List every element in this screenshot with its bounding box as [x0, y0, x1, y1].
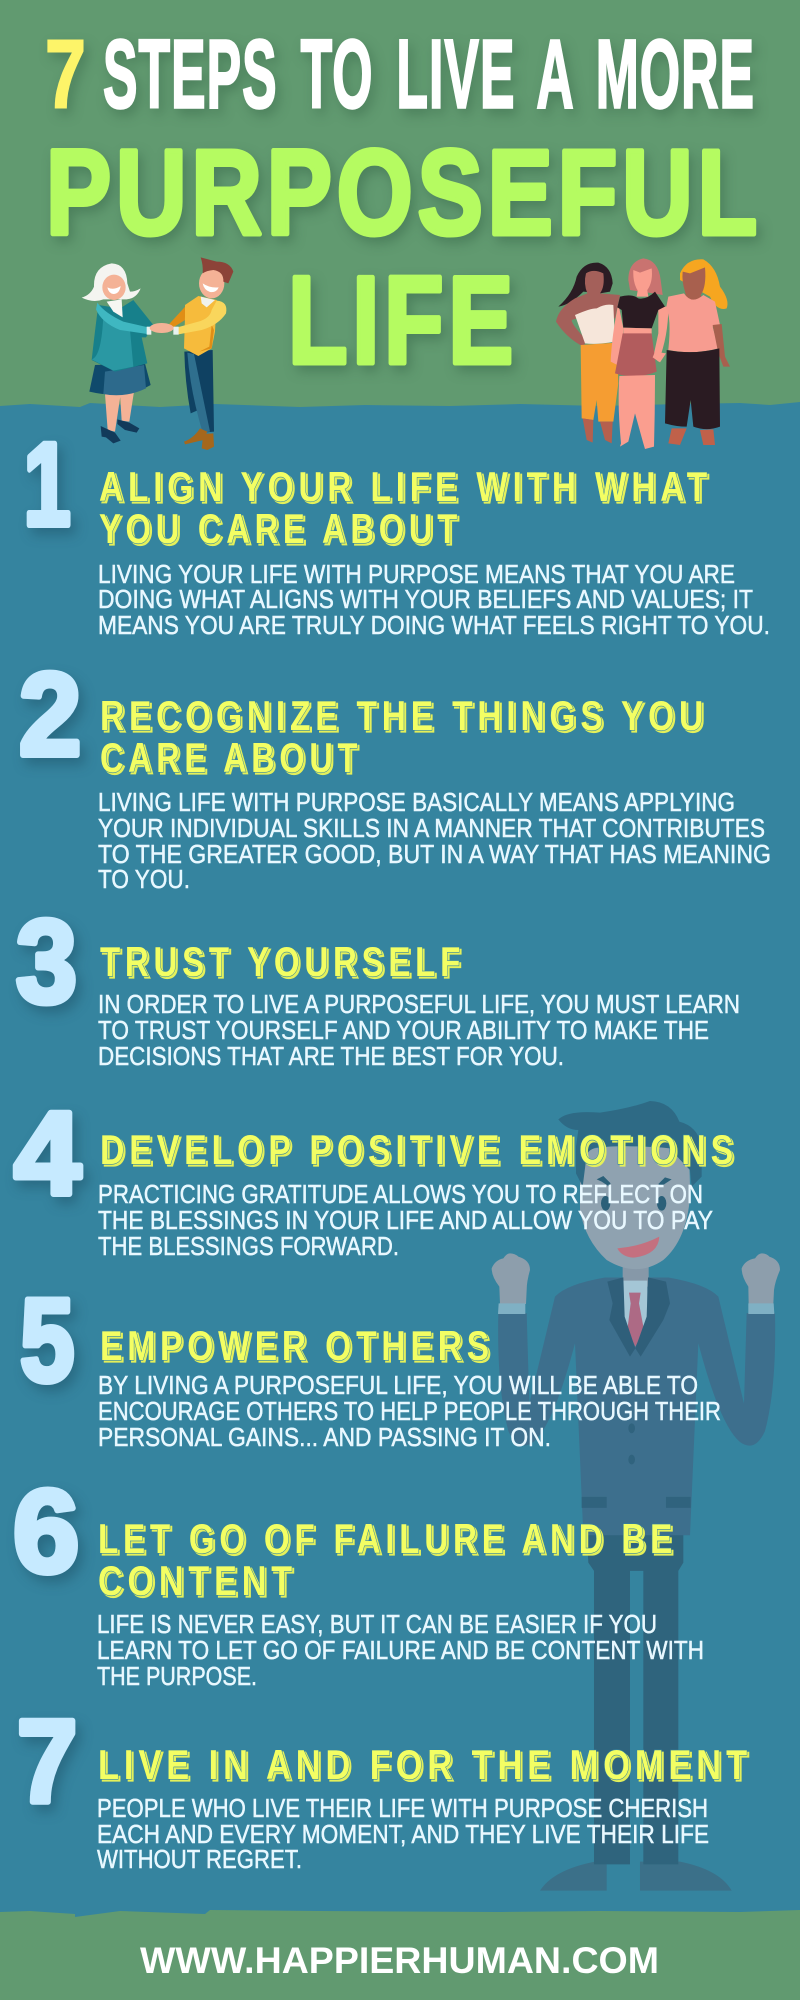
- man: sweater shadow arm: [168, 305, 187, 327]
- man: buttons and pocket flaps: [582, 1423, 691, 1508]
- man: head, collar and fists: [492, 1101, 780, 1357]
- woman 1: top: [575, 305, 615, 344]
- woman: smile: [107, 286, 121, 294]
- step 2: [19, 649, 771, 894]
- woman 3: hand: [653, 352, 666, 362]
- body 7: [97, 1793, 709, 1874]
- man: jacket and sleeves: [498, 1277, 775, 1535]
- body 2: [98, 787, 771, 894]
- footer url: WWW.HAPPIERHUMAN.COM: [140, 1940, 659, 1981]
- man: shirt: [623, 1281, 647, 1347]
- woman 2: legs: [619, 375, 655, 449]
- woman 2: arms and neck: [611, 287, 668, 365]
- body 4: PRACTICING GRATITUDE ALLOWS YOU TO REFLECT ON: [98, 1179, 703, 1209]
- man: hair: [558, 1101, 702, 1187]
- body 5: BY LIVING A PURPOSEFUL LIFE, YOU WILL BE ABLE TO: [98, 1370, 698, 1400]
- woman 2: crop top: [617, 292, 665, 328]
- step 1: [24, 418, 770, 640]
- heading 5: EMPOWER OTHERS: [100, 1322, 494, 1369]
- illustration: older woman and young man shaking hands: [82, 257, 233, 450]
- man: face: [199, 268, 224, 298]
- body 6: [97, 1609, 704, 1691]
- man: necktie: [627, 1293, 644, 1347]
- woman 2: face: [633, 268, 652, 292]
- heading 1: YOU CARE ABOUT: [99, 505, 462, 552]
- body 7: EACH AND EVERY MOMENT, AND THEY LIVE THEIR LIFE: [97, 1819, 709, 1849]
- heading 2: CARE ABOUT: [100, 734, 362, 781]
- man: neck: [623, 1263, 649, 1287]
- illustration: three women: [556, 258, 730, 449]
- title line 1: 7: 7: [45, 20, 86, 128]
- number 7: 7: [17, 1696, 77, 1828]
- number 1: 1: [24, 418, 71, 550]
- illustration: man in suit (faded): [492, 1101, 780, 1891]
- heading 1: [99, 463, 712, 552]
- background: blue panel with torn edges: [0, 402, 800, 1917]
- man: eyebrows and eyes: [597, 1176, 672, 1211]
- heading 2: [100, 692, 708, 781]
- title: [45, 20, 762, 390]
- woman 3: feet: [668, 428, 715, 445]
- woman: arm: [96, 303, 148, 334]
- body 4: THE BLESSINGS FORWARD.: [98, 1231, 399, 1261]
- body 4: [98, 1179, 713, 1261]
- body 7: WITHOUT REGRET.: [97, 1844, 302, 1874]
- woman: jacket front: [92, 315, 133, 371]
- heading 3: TRUST YOURSELF: [100, 938, 465, 985]
- title line 3: life: LIFE: [288, 252, 518, 390]
- body 4: THE BLESSINGS IN YOUR LIFE AND ALLOW YOU TO PAY: [98, 1205, 713, 1235]
- body 6: LEARN TO LET GO OF FAILURE AND BE CONTENT WITH: [97, 1635, 704, 1665]
- man: lapels: [607, 1277, 670, 1357]
- body 7: PEOPLE WHO LIVE THEIR LIFE WITH PURPOSE CHERISH: [97, 1793, 708, 1823]
- woman 1: feet: [583, 418, 613, 443]
- woman 3: face: [682, 267, 705, 300]
- body 5: [98, 1370, 721, 1452]
- woman 1: trousers: [581, 343, 618, 422]
- woman: shoes: [101, 419, 139, 443]
- number 3: 3: [16, 896, 77, 1028]
- number 5: 5: [20, 1274, 74, 1406]
- step 3: [16, 896, 740, 1071]
- man: raised fists: [492, 1253, 780, 1304]
- woman: face: [102, 275, 126, 300]
- step 6: [13, 1467, 704, 1691]
- body 2: TO YOU.: [98, 864, 190, 894]
- woman: blouse: [107, 299, 123, 317]
- man: face: [580, 1146, 690, 1269]
- man: shirt cuffs: [498, 1303, 774, 1314]
- woman 3: hair: [680, 259, 727, 309]
- woman 1: hair: [558, 263, 613, 307]
- woman: cuff: [147, 327, 151, 335]
- body 3: DECISIONS THAT ARE THE BEST FOR YOU.: [98, 1041, 564, 1071]
- step 4: [14, 1088, 738, 1261]
- man: shoes: [184, 428, 214, 450]
- body 6: LIFE IS NEVER EASY, BUT IT CAN BE EASIER IF YOU: [97, 1609, 657, 1639]
- woman 2: midriff: [623, 328, 652, 336]
- man: cuff and hands: [173, 327, 179, 335]
- man: shoes: [540, 1862, 732, 1891]
- man: sweater side shade: [199, 325, 214, 352]
- woman: legs: [105, 392, 134, 432]
- number 2: 2: [19, 649, 81, 781]
- step 7: [17, 1696, 752, 1874]
- man: arm: [177, 301, 226, 334]
- woman 1: body and arm: [556, 271, 620, 347]
- heading 6: [98, 1515, 677, 1604]
- heading 6: CONTENT: [98, 1557, 297, 1604]
- woman: skirt panel: [103, 365, 146, 395]
- man: smile: [203, 283, 219, 292]
- man: trousers: [184, 350, 214, 433]
- man: smile: [617, 1237, 659, 1258]
- man: body: [498, 1277, 775, 1891]
- woman: skirt: [89, 363, 151, 395]
- body 3: TO TRUST YOURSELF AND YOUR ABILITY TO MAKE THE: [98, 1015, 709, 1045]
- body 5: PERSONAL GAINS... AND PASSING IT ON.: [98, 1422, 551, 1452]
- body 6: THE PURPOSE.: [97, 1661, 257, 1691]
- number 6: 6: [13, 1467, 79, 1598]
- number 4: 4: [14, 1088, 81, 1220]
- woman 3: arm: [713, 324, 730, 367]
- man: trousers: [587, 1533, 683, 1864]
- man: hair: [201, 257, 233, 283]
- woman 2: skirt: [615, 333, 657, 376]
- woman 2: hair: [628, 258, 663, 295]
- man: collar: [201, 297, 215, 307]
- woman 3: top: [666, 293, 720, 352]
- man: trouser stripe: [187, 353, 210, 433]
- woman: jacket: [92, 300, 153, 372]
- body 1: [98, 559, 770, 640]
- man: sweater: [184, 296, 217, 356]
- woman: hair: [82, 263, 141, 301]
- body 3: [98, 989, 740, 1071]
- woman 3: trousers: [665, 348, 720, 429]
- clasped hands: [150, 323, 174, 333]
- step 5: [20, 1274, 721, 1452]
